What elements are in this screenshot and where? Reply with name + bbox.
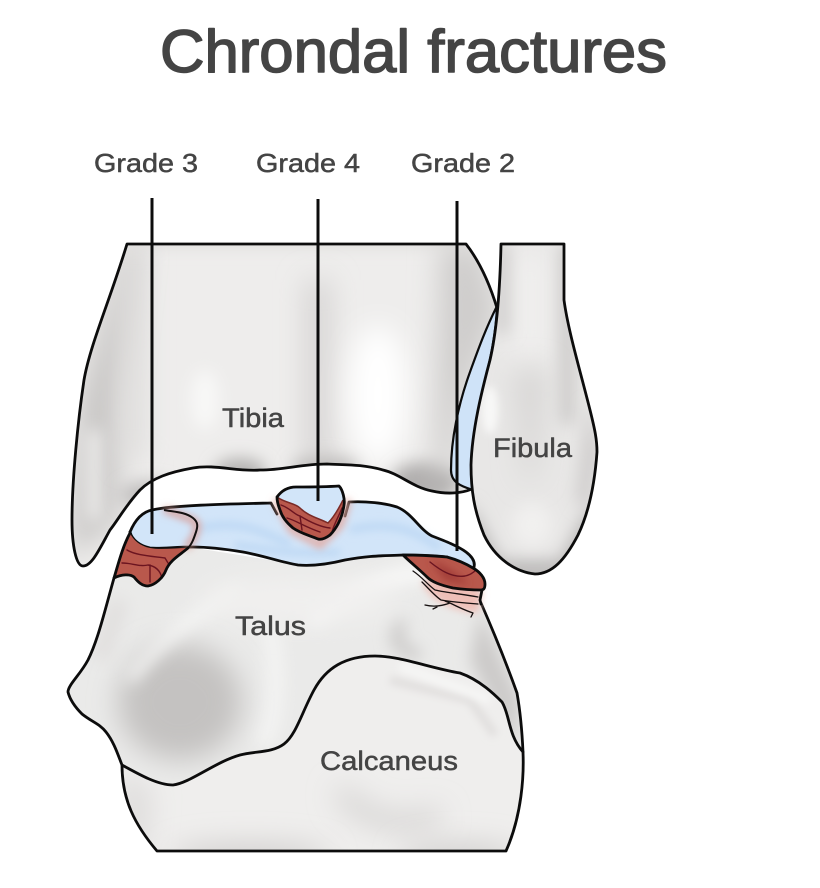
bone: calcaneus — [120, 658, 525, 852]
label: Grade 3: Grade 3 — [94, 148, 198, 178]
leader line: Grade 3 — [150, 198, 154, 534]
lesion: grade 3 — [114, 510, 197, 586]
bone label: Tibia: Tibia — [222, 403, 285, 433]
bone: tibia — [70, 242, 497, 568]
cartilage: tibiofibular joint — [451, 306, 497, 490]
bone: fibula — [470, 242, 598, 576]
label: Grade 2: Grade 2 — [411, 148, 515, 178]
label: Grade 4: Grade 4 — [256, 148, 360, 178]
leader line: Grade 4 — [316, 199, 320, 501]
bone: talus — [60, 540, 530, 790]
bone label: Calcaneus: Calcaneus — [320, 746, 458, 776]
title: Chrondal fractures — [160, 18, 667, 85]
bone label: Fibula: Fibula — [493, 433, 573, 463]
cartilage: talar dome — [130, 502, 474, 570]
lesion: grade 2 — [403, 555, 485, 617]
leader line: Grade 2 — [456, 201, 458, 551]
lesion: grade 4 fragment — [276, 486, 348, 545]
bone label: Talus: Talus — [235, 611, 306, 641]
